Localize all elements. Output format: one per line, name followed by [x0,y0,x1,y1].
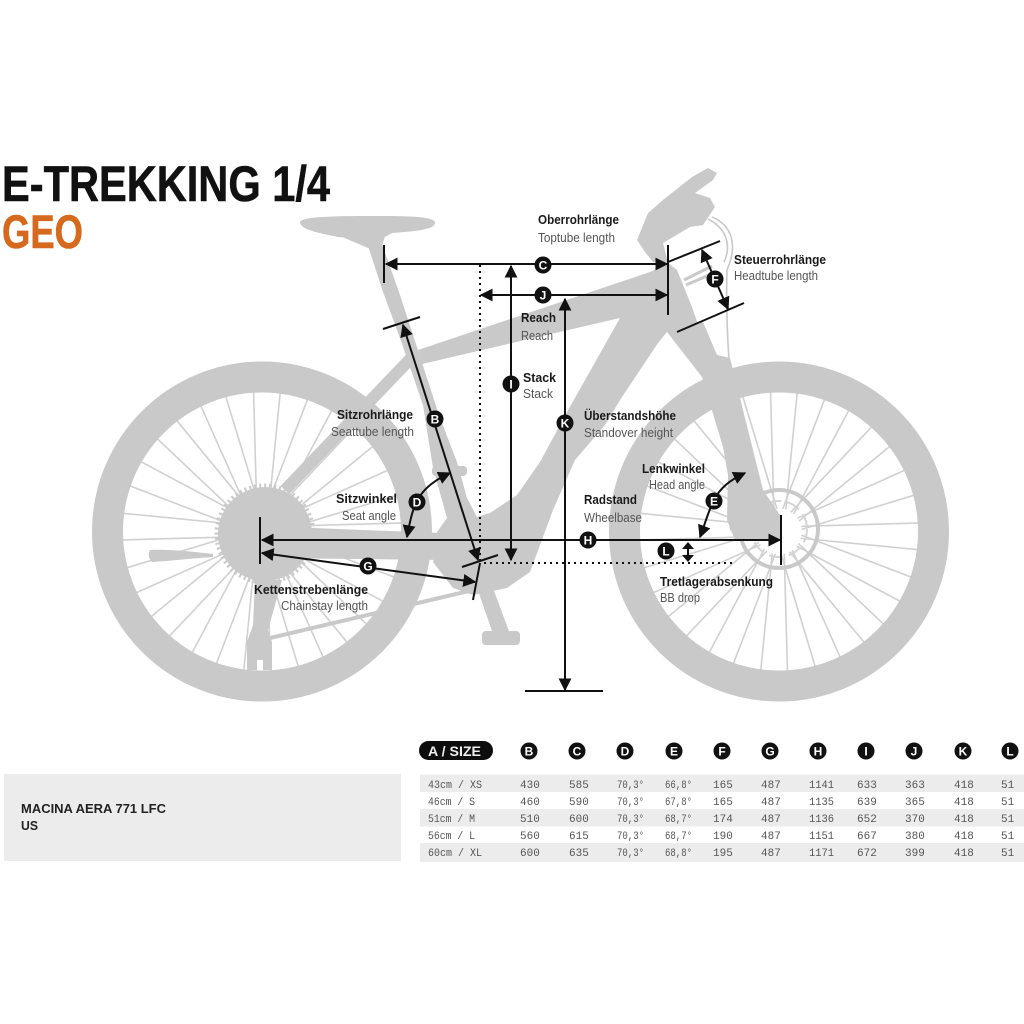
label: Tretlagerabsenkung: Tretlagerabsenkung [660,575,773,589]
table row 56cm / L: 487 [761,831,781,843]
measurement K: standover height [525,299,603,691]
measurement K: standover height: K [561,416,570,430]
table row 43cm / XS: 430 [520,780,540,792]
table header: column badges: G [765,744,775,758]
table row 43cm / XS: 51 [1001,780,1015,792]
subtitle: GEO: GEO [2,205,83,258]
label: Überstandshöhe: Standover height [584,426,673,440]
saddle and seatpost [300,216,435,248]
label: Oberrohrlänge: Oberrohrlänge [538,213,619,227]
table row 60cm / XL: 487 [761,848,781,860]
table row 43cm / XS: 66,8° [665,780,692,792]
measurement H: wheelbase: H [584,534,592,548]
table row 60cm / XL: 195 [713,848,733,860]
table header: column badges: B [525,744,534,758]
table row 51cm / M: 652 [857,814,877,826]
label: Stack [523,371,556,401]
bike silhouette [108,168,934,686]
label: Sitzrohrlänge: Seattube length [331,425,414,439]
measurement C: toptube length [384,245,668,315]
table row 56cm / L: 1151 [809,831,834,843]
label: Überstandshöhe [584,408,676,440]
measurement F: headtube length: F [711,272,719,286]
table row 46cm / S: 1135 [809,797,834,809]
table row 51cm / M: 370 [905,814,925,826]
measurement D: seat angle [407,473,450,537]
table row 46cm / S: 46cm / S [428,797,475,809]
rear cassette and derailleur [149,486,473,670]
table row 46cm / S: 67,8° [665,797,692,809]
table row 56cm / L: 51 [1001,831,1015,843]
table row 43cm / XS: 1141 [809,780,834,792]
label: Steuerrohrlänge: Steuerrohrlänge [734,253,826,267]
label: Sitzwinkel: Sitzwinkel [336,492,397,506]
measurement D: seat angle: D [413,496,422,510]
table row 46cm / S: 460 [520,797,540,809]
table row 46cm / S: 590 [569,797,589,809]
table row 56cm / L: 68,7° [665,831,692,843]
table row 56cm / L: 667 [857,831,877,843]
table row 46cm / S: 365 [905,797,925,809]
table row 60cm / XL: 600 [520,848,540,860]
measurement B: seattube length [383,317,498,567]
head tube, fork and handlebar [637,168,780,540]
table row 43cm / XS: 585 [569,780,589,792]
table row 60cm / XL: 672 [857,848,877,860]
table row 56cm / L: 418 [954,831,974,843]
table header: column badges: C [573,744,582,758]
frame: top tube, down tube and motor [418,263,700,595]
table row 43cm / XS: 418 [954,780,974,792]
label: Stack: Stack [523,387,554,401]
table row 43cm / XS [428,780,1015,792]
front wheel [624,377,934,686]
table row 60cm / XL: 399 [905,848,925,860]
table row 46cm / S: 639 [857,797,877,809]
label: Steuerrohrlänge: Headtube length [734,269,818,283]
measurement L: BB drop: L [662,544,670,558]
table header: column badges: K [959,744,968,758]
title: E-TREKKING 1/4 [2,156,330,212]
label: Lenkwinkel [642,462,705,492]
measurement H: wheelbase [260,515,781,565]
front disc brake [727,490,818,568]
table row 46cm / S: 51 [1001,797,1015,809]
crank and pedal [475,580,520,645]
table header: column badges: L [1006,744,1014,758]
table row 51cm / M: 418 [954,814,974,826]
table row 46cm / S: 487 [761,797,781,809]
model panel: US [21,818,38,833]
label: Reach: Reach [521,311,556,325]
table header: size pill [419,741,493,760]
table header: column badges: H [814,744,822,758]
table row 56cm / L [428,831,1015,843]
table row 56cm / L: 190 [713,831,733,843]
table row 51cm / M: 51 [1001,814,1015,826]
table header: column badges: D [621,744,630,758]
table row 43cm / XS: 43cm / XS [428,780,482,792]
table row stripes [420,774,1024,862]
table row 60cm / XL: 70,3° [617,848,644,860]
label: Überstandshöhe: Überstandshöhe [584,408,676,423]
label: Oberrohrlänge: Toptube length [538,231,615,245]
measurement E: head angle [700,473,745,537]
table row 60cm / XL: 418 [954,848,974,860]
table row 60cm / XL: 635 [569,848,589,860]
rear wheel [108,377,416,686]
measurement F: headtube length [668,241,744,332]
table row 56cm / L: 380 [905,831,925,843]
label: Kettenstrebenlänge: Kettenstrebenlänge [254,583,368,597]
table row 60cm / XL: 1171 [809,848,834,860]
model panel: MACINA AERA 771 LFC [21,801,167,816]
label: Tretlagerabsenkung [660,575,773,605]
table row 43cm / XS: 633 [857,780,877,792]
table row 51cm / M: 487 [761,814,781,826]
table row 60cm / XL: 51 [1001,848,1015,860]
label: Stack: Stack [523,371,556,385]
table header: column badges [520,742,1018,760]
table row 51cm / M: 1136 [809,814,834,826]
label: Tretlagerabsenkung: BB drop [660,591,700,605]
label: Kettenstrebenlänge [254,583,368,613]
measurement I: stack: I [509,378,513,392]
label: Radstand: Radstand [584,493,637,507]
table row 43cm / XS: 165 [713,780,733,792]
table row 56cm / L: 56cm / L [428,831,475,843]
label: Sitzwinkel: Seat angle [342,509,396,523]
table row 60cm / XL [428,848,1015,860]
label: Lenkwinkel: Head angle [649,478,705,492]
table row 51cm / M [428,814,1015,826]
label: Radstand [584,493,642,525]
label: Lenkwinkel: Lenkwinkel [642,462,705,476]
model panel [4,774,401,861]
table row 51cm / M: 68,7° [665,814,692,826]
label: Kettenstrebenlänge: Chainstay length [281,599,368,613]
table header: column badges: I [864,744,868,758]
table header: column badges: F [718,744,726,758]
table header: column badges: J [911,744,917,758]
table row 51cm / M: 70,3° [617,814,644,826]
table row 46cm / S: 165 [713,797,733,809]
label: Sitzwinkel [336,492,397,523]
measurement G: chainstay length [262,553,480,600]
label: Sitzrohrlänge [331,408,414,439]
measurement L: BB drop [658,542,694,562]
table row 51cm / M: 174 [713,814,733,826]
table row 51cm / M: 51cm / M [428,814,475,826]
table row 56cm / L: 560 [520,831,540,843]
label: Sitzrohrlänge: Sitzrohrlänge [337,408,413,422]
frame: seat tube, clamp, stays [262,244,490,560]
label: Reach [521,311,556,343]
measurement C: toptube length: C [539,258,548,272]
table row 60cm / XL: 60cm / XL [428,848,482,860]
table row 51cm / M: 600 [569,814,589,826]
table row 43cm / XS: 70,3° [617,780,644,792]
measurement J: reach [481,286,667,304]
table row 51cm / M: 510 [520,814,540,826]
table row 56cm / L: 615 [569,831,589,843]
table row 56cm / L: 70,3° [617,831,644,843]
measurement E: head angle: E [710,494,718,508]
label: Steuerrohrlänge [734,253,826,283]
label: Radstand: Wheelbase [584,511,642,525]
table header: size pill: A / SIZE [428,743,481,759]
table row 46cm / S: 70,3° [617,797,644,809]
table row 43cm / XS: 363 [905,780,925,792]
label: Reach: Reach [521,329,553,343]
table row 43cm / XS: 487 [761,780,781,792]
table header: column badges: E [670,744,678,758]
table row 60cm / XL: 68,8° [665,848,692,860]
label: Oberrohrlänge [538,213,619,245]
table row 46cm / S: 418 [954,797,974,809]
measurement B: seattube length: B [431,412,440,426]
measurement G: chainstay length: G [363,560,373,574]
measurement J: reach: J [540,288,546,302]
reference dotted lines [480,265,734,563]
measurement I: stack [502,266,520,560]
table row 46cm / S [428,797,1015,809]
